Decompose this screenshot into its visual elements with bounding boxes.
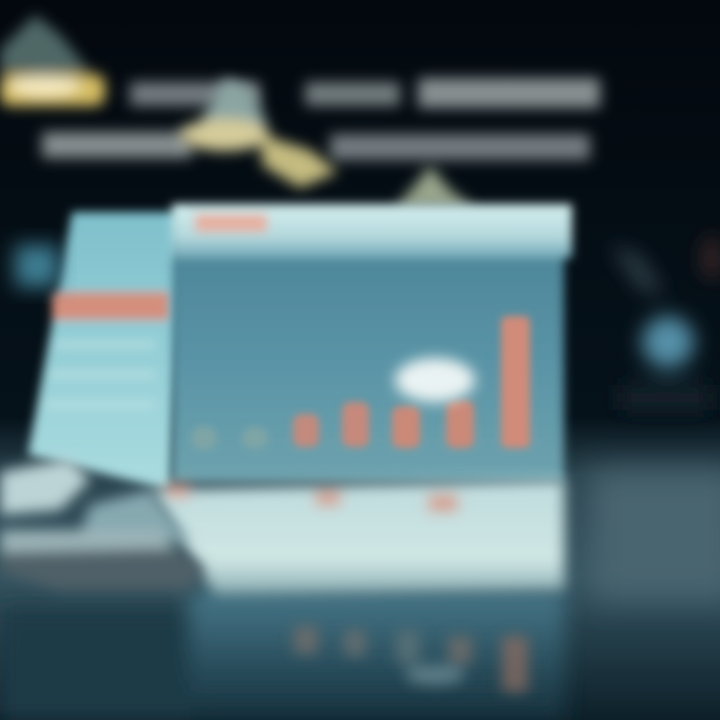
icon: stacked shape left bbox=[0, 458, 205, 590]
side column header bbox=[52, 292, 170, 320]
panel: side column bbox=[28, 212, 185, 490]
chart reflection bbox=[294, 626, 528, 692]
right side glow bbox=[610, 236, 720, 410]
right floor bbox=[590, 470, 720, 600]
bar chart bbox=[191, 316, 530, 450]
icon: small blue marker bbox=[15, 245, 59, 287]
icon: lamp centre bbox=[180, 78, 338, 188]
floor reflection bbox=[0, 590, 565, 720]
panel: chart bbox=[172, 204, 572, 482]
panel header band bbox=[172, 204, 572, 258]
header label bbox=[195, 214, 267, 232]
icon: lamp left bbox=[0, 15, 105, 106]
callout cloud bbox=[395, 358, 475, 402]
panel: lower strip bbox=[150, 480, 565, 595]
title text block bbox=[42, 78, 600, 160]
icon: lamp right bbox=[395, 165, 475, 208]
